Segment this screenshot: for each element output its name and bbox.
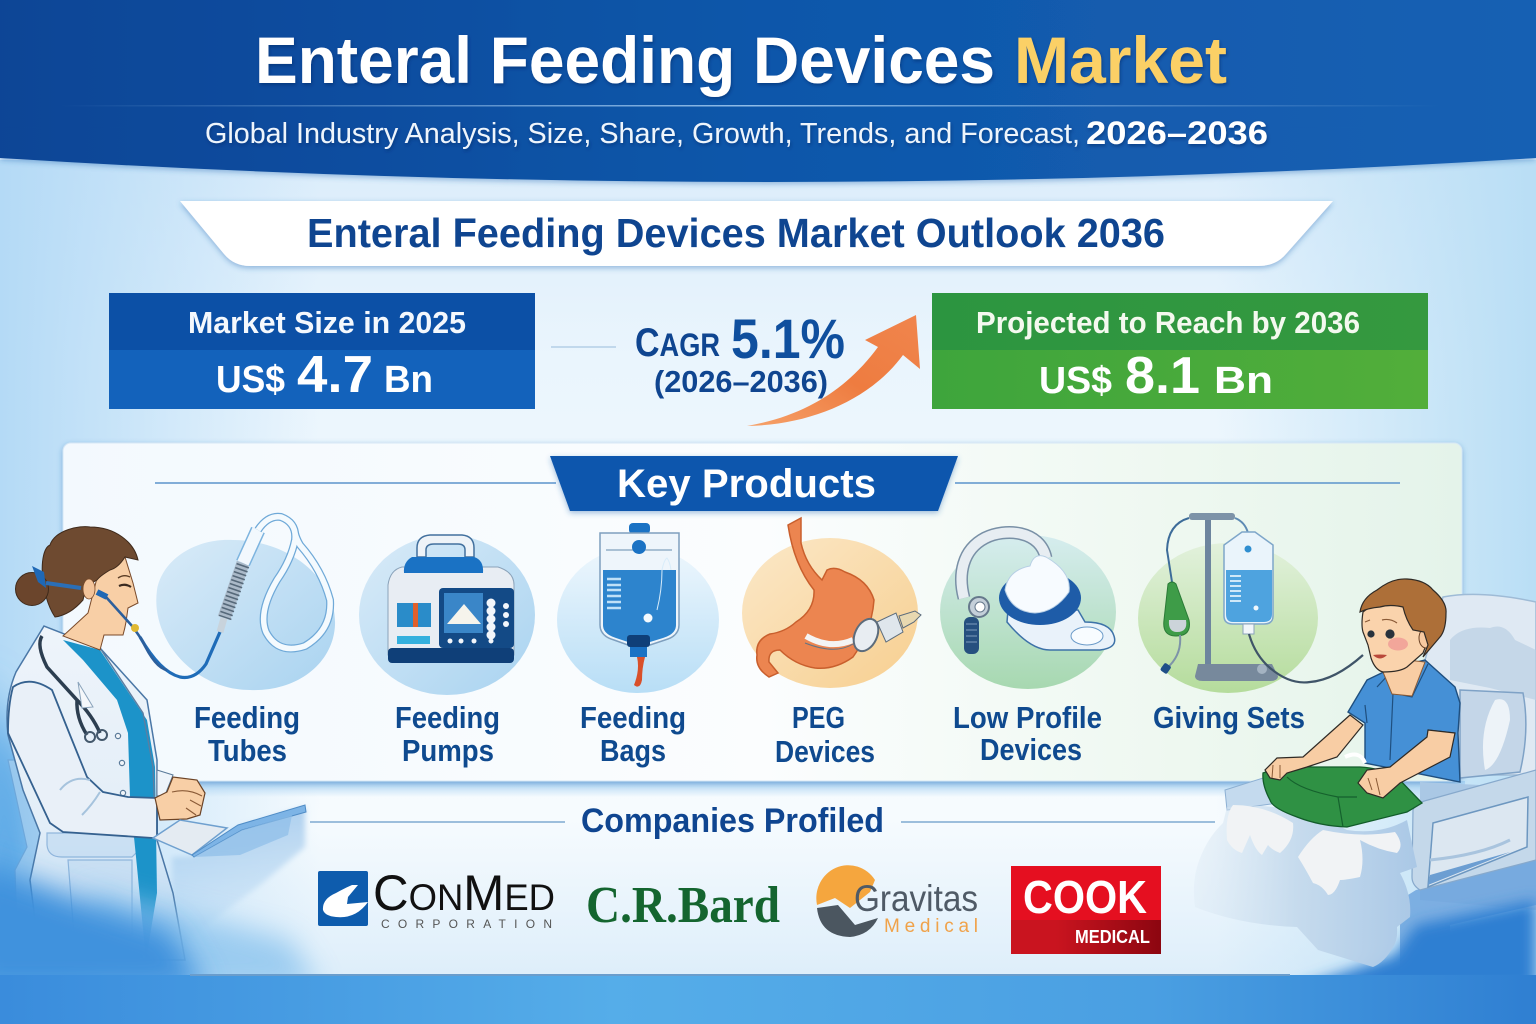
product labels: Bags [600,733,666,768]
doctor hands [155,777,205,820]
outlook heading: Enteral Feeding Devices Market Outlook 2036 [307,210,1165,256]
product labels: Feeding [194,700,300,735]
product labels: Feeding [395,700,500,735]
key products badge [550,456,958,511]
icon: feeding tube [140,517,335,690]
cagr block [551,307,845,399]
stat box: market size 2025 [109,293,535,409]
stat box: market size 2025: Market Size in 2025 [188,305,466,340]
product labels: Tubes [208,733,287,768]
product labels: Devices [980,732,1082,767]
child hair [1360,579,1446,657]
doctor feeding tube [97,592,107,597]
logo: Gravitas Medical [816,865,978,937]
product labels [194,700,1305,769]
bottom left fade [0,860,320,990]
subtitle: Global Industry Analysis, Size, Share, Growth, Trends, and Forecast, [205,118,1080,150]
logo: Cook Medical: COOK [1023,871,1147,923]
icon: low profile device [940,533,1116,689]
blue floor fade [1290,900,1536,990]
product labels: Giving Sets [1153,700,1305,735]
child arms and hands [1265,715,1455,798]
stat box: market size 2025: Bn [384,359,433,401]
bed back [1425,594,1536,778]
title: Market [1014,23,1227,97]
icon: feeding bag [557,523,719,693]
icon: feeding pump [359,535,535,695]
logo: C.R.Bard: C.R.Bard [586,877,780,934]
header band [0,0,1536,182]
stat box: projected 2036: 8.1 [1125,347,1200,405]
doctor chair [8,760,305,960]
logo: Cook Medical: MEDICAL [1075,927,1150,947]
companies heading: Companies Profiled [581,802,884,840]
blanket [1194,778,1417,967]
illustration: doctor [7,527,306,960]
stat box: projected 2036: Bn [1214,360,1273,402]
child shirt [1348,660,1460,782]
logo: ConMed: CORPORATION [381,917,552,931]
stat box: market size 2025: 4.7 [297,346,373,404]
panel: key products [60,443,1465,797]
bed frame [1400,770,1536,975]
product labels: Low Profile [953,700,1102,735]
title: Enteral Feeding Devices [255,23,995,97]
product labels: Feeding [580,700,686,735]
pillow [1263,767,1422,827]
outlook ribbon [180,201,1333,266]
doctor laptop [153,805,306,857]
subtitle: 2026–2036 [1086,115,1268,151]
stat box: projected 2036 [932,293,1428,409]
footer band [0,974,1536,1024]
growth arrow [747,315,920,426]
doctor arm [8,682,157,838]
stat box: market size 2025: US$ [216,359,285,401]
illustration: child in bed [1194,579,1536,990]
key products badge: Key Products [617,462,876,506]
cagr block: 5.1% [731,307,845,370]
doctor stethoscope [40,636,100,735]
stat box: projected 2036: Projected to Reach by 2036 [976,305,1360,340]
icon: giving set [1115,513,1363,693]
doctor shirt [63,640,157,960]
doctor neck and face [63,557,138,650]
logo: Gravitas Medical: Medical [884,916,978,937]
cagr block: (2026–2036) [654,364,828,399]
doctor coat [7,626,185,960]
logo: ConMed: CONMED [373,865,555,921]
product labels: Pumps [402,733,494,768]
icon: PEG device [742,518,921,688]
cagr block: CAGR [635,321,720,365]
doctor hair [42,527,138,617]
product labels: Devices [775,734,875,769]
logo: Gravitas Medical: Gravitas [854,878,978,919]
product labels: PEG [792,700,845,735]
logo: Cook Medical [1011,866,1161,954]
child neck and face [1362,595,1433,696]
stat box: projected 2036: US$ [1039,360,1112,402]
logo: ConMed [318,865,555,931]
